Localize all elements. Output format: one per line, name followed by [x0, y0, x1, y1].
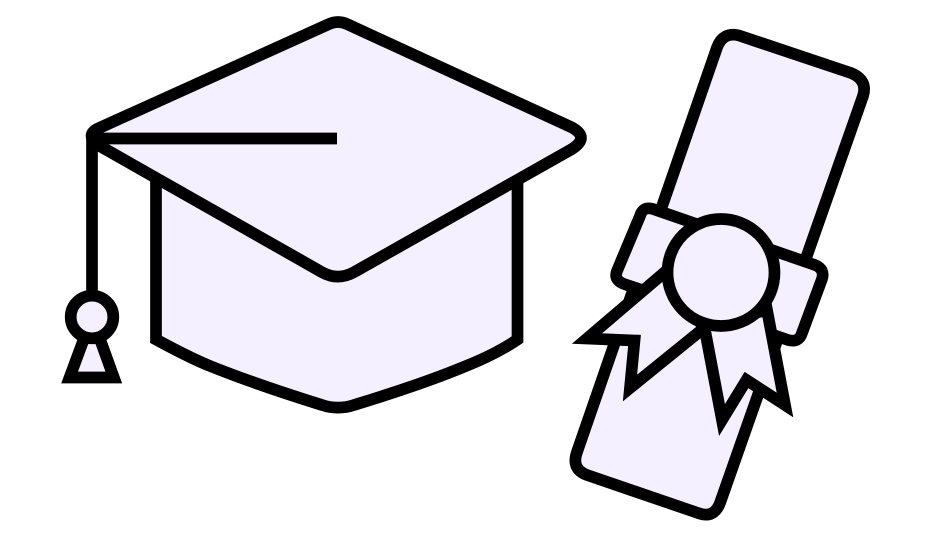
- ribbon band: [616, 208, 823, 341]
- cap strap: [92, 133, 337, 144]
- rosette tail left: [587, 272, 704, 388]
- rosette medal: [668, 219, 774, 326]
- rosette tail right: [704, 310, 785, 420]
- cap base: [156, 175, 518, 408]
- tassel fringe: [70, 317, 114, 378]
- tassel knob: [71, 296, 113, 338]
- tassel cord: [86, 138, 98, 295]
- cap top board: [92, 22, 581, 277]
- icon: diploma: [575, 35, 864, 515]
- icon: graduation cap: [70, 22, 581, 408]
- diploma scroll: [575, 35, 864, 515]
